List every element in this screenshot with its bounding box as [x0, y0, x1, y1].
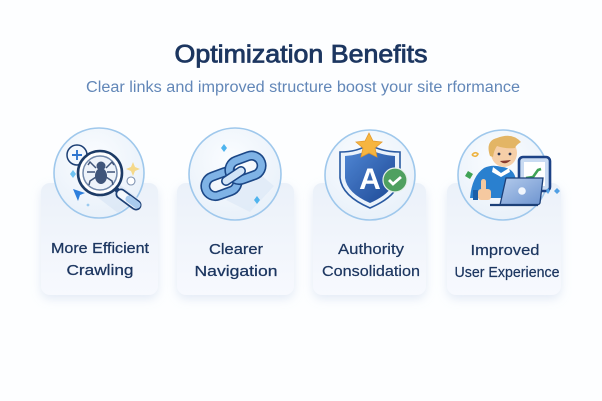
- label: Crawling: [66, 262, 134, 279]
- icon circle 2: [189, 128, 281, 220]
- label: Navigation: [194, 263, 278, 280]
- icon circle 1: [54, 128, 144, 218]
- label: Improved: [470, 242, 540, 259]
- icon circle 4: [458, 130, 548, 220]
- panel: improved user experience: [447, 130, 561, 295]
- label: Authority: [338, 241, 405, 258]
- icon circle 3: [325, 130, 415, 220]
- icon: shield with star and check: [340, 133, 407, 208]
- label: Consolidation: [322, 263, 420, 280]
- icon: shield with star and check: A: [359, 163, 381, 196]
- icon: sparkles: [221, 144, 260, 204]
- card background 3: [313, 183, 426, 295]
- panel: authority consolidation: [313, 130, 426, 295]
- icon: magnifier with spider: [67, 145, 140, 213]
- card background 4: [447, 183, 561, 295]
- label: More Efficient: [51, 240, 150, 257]
- subtitle: Clear links and improved structure boost your site rformance: [86, 79, 520, 96]
- panel: more efficient crawling: [41, 128, 158, 295]
- card background 1: [41, 183, 158, 295]
- panel: clearer navigation: [177, 128, 294, 295]
- icon: person with laptop: [465, 136, 560, 205]
- title: Optimization Benefits: [174, 40, 428, 68]
- label: Clearer: [209, 241, 263, 258]
- label: User Experience: [454, 264, 560, 281]
- icon: chain link: [203, 153, 274, 212]
- card background 2: [177, 183, 294, 295]
